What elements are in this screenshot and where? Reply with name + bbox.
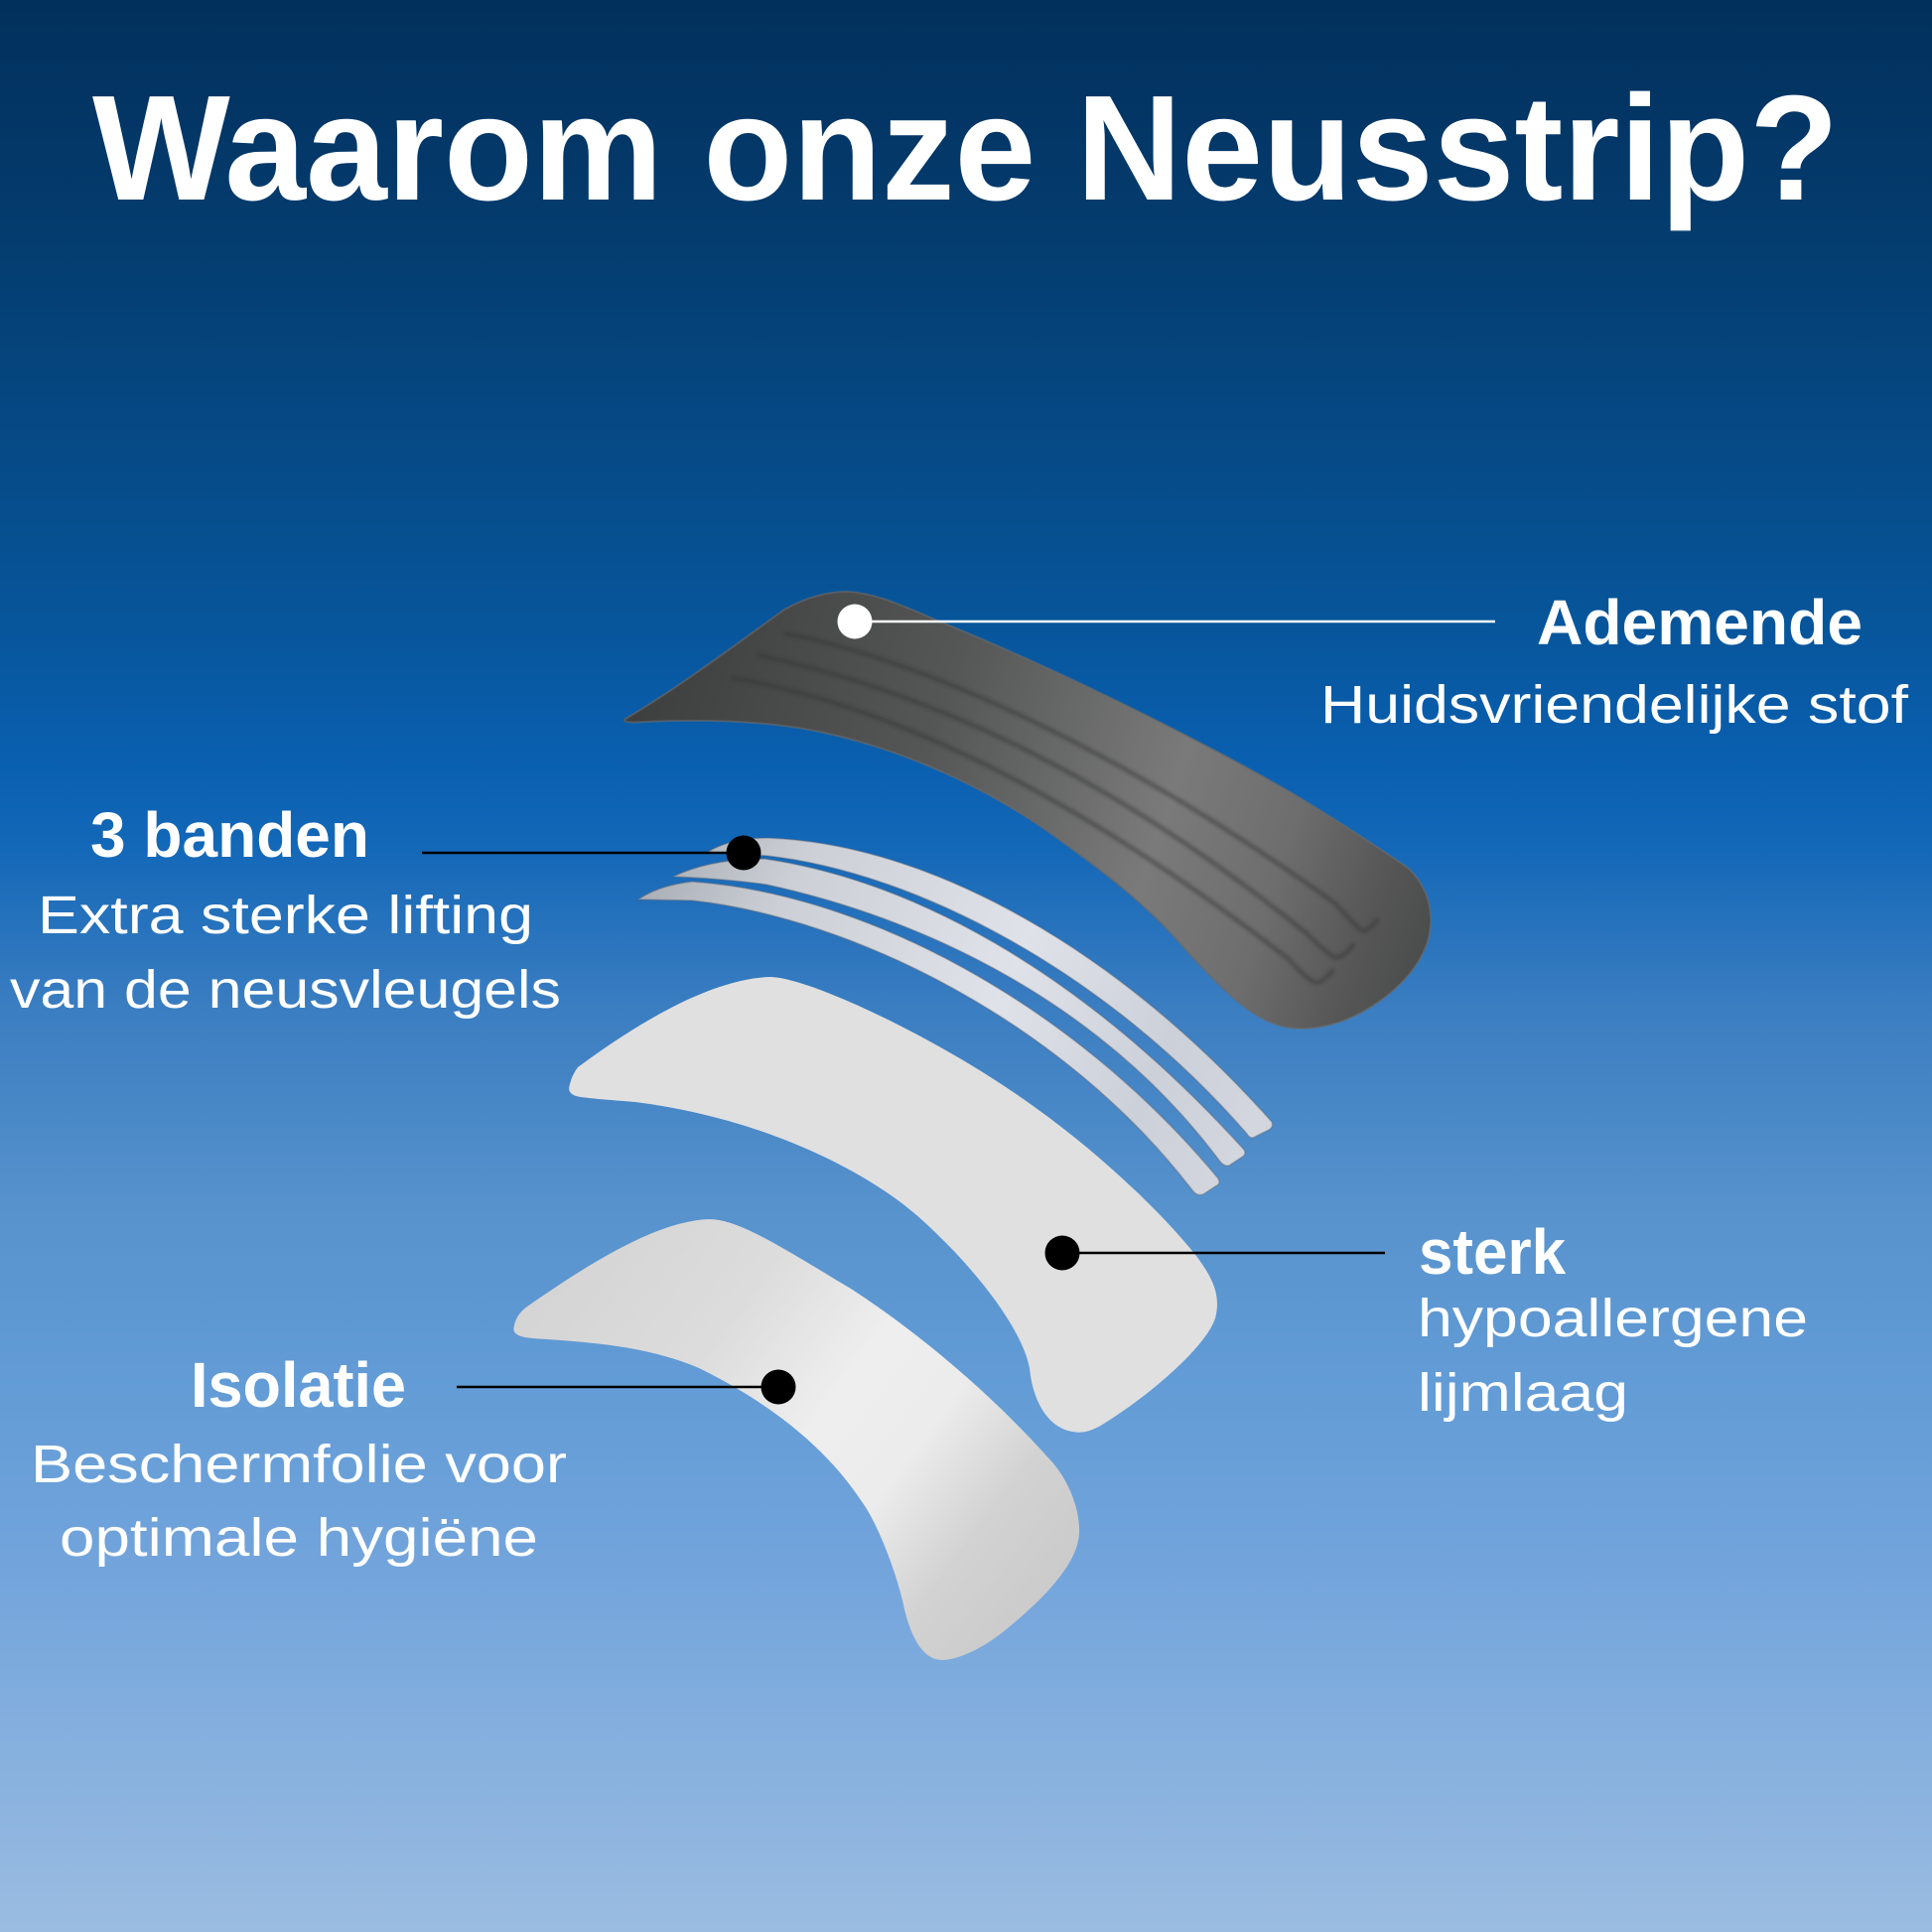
layer: protective film [513,1219,1079,1660]
callout: Isolatie [31,1349,796,1568]
band 2 [673,859,1245,1166]
callout: Ademende [838,587,1909,735]
title: Waarom onze Neusstrip? [92,64,1839,231]
leader line and dot [457,1370,796,1404]
label description: Extra sterke lifting [38,886,533,945]
label heading: Ademende [1537,587,1863,658]
leader line and dot [422,836,760,870]
band 3 [638,882,1219,1195]
band 1 [708,838,1273,1138]
layer: three lifting bands [638,838,1273,1195]
label heading: Isolatie [191,1349,406,1421]
label heading: 3 banden [90,799,369,871]
callout: Isolatie: optimale hygiëne [60,1508,538,1568]
leader line and dot [1044,1235,1385,1271]
layer: breathable fabric strip [624,592,1431,1029]
callout: sterk: lijmlaag [1418,1363,1628,1423]
label description: hypoallergene [1418,1289,1808,1348]
callout: sterk [1044,1216,1808,1423]
callout: 3 banden [10,799,760,1020]
label heading: sterk [1419,1216,1566,1288]
callout: 3 banden: van de neusvleugels [10,960,561,1020]
exploded strip diagram [513,592,1431,1660]
leader line and dot [838,604,1495,639]
label description: Beschermfolie voor [31,1435,567,1494]
layer: adhesive [569,977,1217,1433]
label description: Huidsvriendelijke stof [1320,675,1909,735]
